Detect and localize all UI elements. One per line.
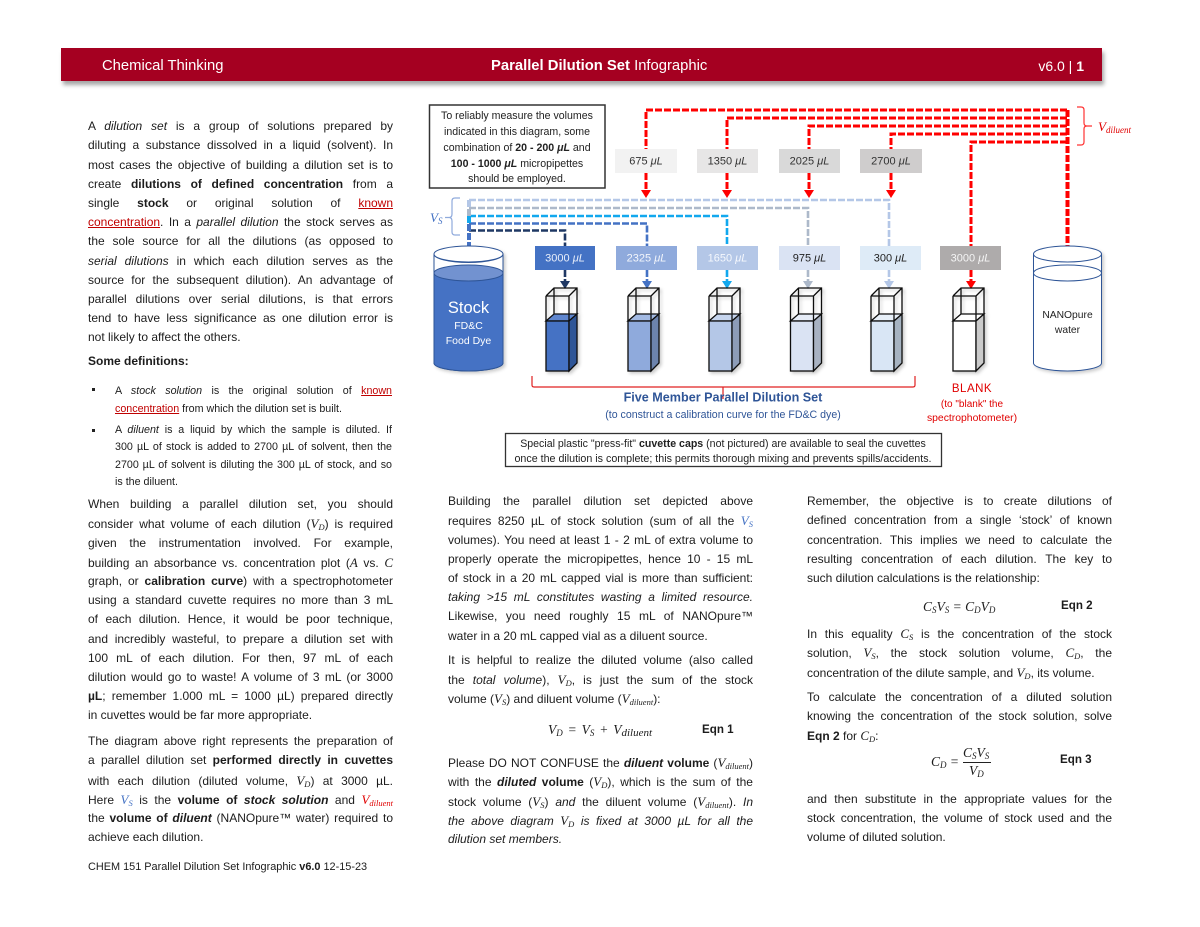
left column: diagram explanation paragraph: The diagram above right represents the preparation of bbox=[88, 734, 393, 748]
stock cylinder: FD&C bbox=[454, 320, 483, 332]
diluent volume labels: 675 μL bbox=[629, 155, 663, 167]
equation 3 fraction: CSVS bbox=[963, 745, 989, 761]
middle column: stock volume paragraph: taking >15 mL constitutes wasting a limited resource. bbox=[448, 590, 753, 604]
heading: blank bbox=[927, 383, 1017, 424]
callout: cuvette caps note: Special plastic "press-fit" cuvette caps (not pictured) are available to seal the cuvettes bbox=[520, 438, 926, 450]
left column: intro paragraph: create dilutions of defined concentration from a bbox=[88, 177, 393, 191]
middle column: stock volume paragraph: properly operate the micropipettes, hence 10 - 15 mL bbox=[448, 552, 753, 566]
equation 3 fraction bbox=[963, 745, 991, 779]
left column: building a parallel dilution set paragraph: of each dilution. Hence, it would be poor technique, bbox=[88, 612, 393, 626]
left column: intro paragraph: single stock or original solution of known bbox=[88, 196, 393, 210]
middle column: do not confuse paragraph: Please DO NOT CONFUSE the diluent volume (Vdiluent) bbox=[448, 755, 753, 771]
header right: version and page: v6.0 | 1 bbox=[1038, 58, 1084, 74]
water cylinder: water bbox=[1054, 325, 1081, 336]
definitions heading: Some definitions: bbox=[88, 354, 189, 368]
left column: building a parallel dilution set paragraph: 100 mL of each dilution. For then, 97 mL of each bbox=[88, 651, 393, 665]
footer note: CHEM 151 Parallel Dilution Set Infographic v6.0 12-15-23 bbox=[88, 861, 367, 873]
bracket: five member dilution set bbox=[532, 376, 915, 399]
left column: building a parallel dilution set paragraph: When building a parallel dilution set, you should bbox=[88, 497, 393, 511]
left column: intro paragraph: A dilution set is a group of solutions prepared by bbox=[88, 119, 393, 133]
definition: diluent: 2700 µL of solvent is diluting the 300 µL of stock, and so bbox=[115, 459, 392, 471]
right column: equality explanation: In this equality CS is the concentration of the stock bbox=[807, 626, 1112, 642]
diluent arrowheads bbox=[641, 190, 976, 289]
middle column: stock volume paragraph: water in a 20 mL capped vial as a diluent source. bbox=[448, 628, 708, 642]
middle column: diluted volume paragraph bbox=[448, 653, 753, 707]
right column: substitute paragraph bbox=[807, 792, 1112, 844]
equation 3 fraction: VD bbox=[969, 763, 984, 779]
diluent volume labels: 2025 μL bbox=[790, 155, 829, 167]
middle column: stock volume paragraph: volumes). You need at least 1 - 2 mL of extra volume to bbox=[448, 533, 753, 547]
left column: building a parallel dilution set paragraph: using a standard cuvette requires no more than 3 mL bbox=[88, 593, 393, 607]
stock arrowheads bbox=[560, 281, 894, 289]
stock volume labels: 3000 μL bbox=[545, 252, 585, 264]
callout: micropipette note: 100 - 1000 μL micropipettes bbox=[451, 158, 583, 170]
equation 3 bbox=[931, 745, 1092, 779]
left column: intro paragraph: the sole source for all the dilutions (as opposed to bbox=[88, 234, 393, 248]
left column: intro paragraph bbox=[88, 119, 394, 344]
right column: objective paragraph bbox=[807, 494, 1112, 585]
left column: diagram explanation paragraph: Here VS is the volume of stock solution and Vdiluent bbox=[88, 792, 393, 808]
diluent volume labels bbox=[615, 149, 922, 173]
left column: building a parallel dilution set paragraph: dilution would go to waste! A volume of 3 mL (or 3000 bbox=[88, 670, 393, 684]
middle column: stock volume paragraph: requires 8250 µL of stock solution (sum of all the VS bbox=[448, 513, 753, 529]
stock volume labels: 300 μL bbox=[874, 252, 907, 264]
stock cylinder bbox=[434, 246, 503, 371]
bracket and label: V stock: S bbox=[438, 216, 443, 226]
middle column: do not confuse paragraph: the above diagram VD is fixed at 3000 µL for all the bbox=[448, 813, 753, 829]
middle column: stock volume paragraph: Likewise, you need roughly 15 mL of NANOpure™ bbox=[448, 609, 753, 623]
left column: intro paragraph: concentration. In a parallel dilution the stock serves as bbox=[88, 215, 393, 229]
stock cylinder: Stock bbox=[448, 299, 490, 317]
cuvette 3 bbox=[709, 288, 740, 371]
water cylinder bbox=[1034, 246, 1102, 371]
equation 2 formula: CSVS = CDVD bbox=[923, 599, 995, 615]
right column: objective paragraph: such dilution calculations is the relationship: bbox=[807, 571, 1040, 585]
callout: micropipette note: To reliably measure the volumes bbox=[441, 110, 593, 122]
right column: objective paragraph: defined concentration from a single ‘stock’ of known bbox=[807, 513, 1112, 527]
middle column: do not confuse paragraph bbox=[448, 755, 753, 846]
stock dashed lines (blue) bbox=[469, 200, 889, 283]
header left: Chemical Thinking: Chemical Thinking bbox=[102, 58, 223, 74]
diluent volume labels: 1350 μL bbox=[708, 155, 747, 167]
stock volume labels: 3000 μL bbox=[951, 252, 990, 264]
right column: objective paragraph: concentration. This implies we need to calculate the bbox=[807, 533, 1112, 547]
left column: diagram explanation paragraph: the volume of diluent (NANOpure™ water) required to bbox=[88, 811, 393, 825]
left column: intro paragraph: serial dilutions in which each dilution serves as the bbox=[88, 254, 393, 268]
left column: diagram explanation paragraph: achieve each dilution. bbox=[88, 830, 203, 844]
cuvette 4 bbox=[790, 288, 822, 371]
equation 1 tag: Eqn 1 bbox=[702, 723, 734, 736]
heading: blank: BLANK bbox=[952, 383, 992, 395]
definition: stock solution: concentration from which the dilution set is built. bbox=[115, 403, 342, 415]
header centre title: Parallel Dilution Set Infographic bbox=[491, 58, 707, 74]
left column: building a parallel dilution set paragraph: consider what volume of each dilution (VD) is required bbox=[88, 516, 393, 532]
right column: substitute paragraph: stock concentration, the volume of stock used and the bbox=[807, 811, 1112, 825]
left column: intro paragraph: tend to have less significance as one dilution error is bbox=[88, 311, 393, 325]
heading: five member parallel dilution set: Five Member Parallel Dilution Set bbox=[624, 390, 823, 404]
bracket and label: V diluent bbox=[1077, 107, 1131, 145]
right column: substitute paragraph: and then substitute in the appropriate values for the bbox=[807, 792, 1112, 806]
bracket and label: V diluent: diluent bbox=[1106, 125, 1131, 135]
callout: micropipette note bbox=[430, 105, 605, 188]
left column: diagram explanation paragraph: a parallel dilution set performed directly in cuvettes bbox=[88, 753, 393, 767]
callout: cuvette caps note bbox=[506, 434, 942, 466]
bullet marker: stock solution bbox=[92, 388, 95, 391]
left column: building a parallel dilution set paragraph: and incredibly wasteful, to prepare a dilution set with bbox=[88, 632, 393, 646]
left column: building a parallel dilution set paragraph: given the instrumentation involved. For example, bbox=[88, 536, 393, 550]
equation 3 tag: Eqn 3 bbox=[1060, 753, 1092, 766]
left column: diagram explanation paragraph: with each dilution (diluted volume, VD) at 3000 µL. bbox=[88, 773, 393, 789]
stock volume labels: 1650 μL bbox=[708, 252, 747, 264]
left column: building a parallel dilution set paragraph: µL; remember 1.000 mL = 1000 µL) prepared directly bbox=[88, 689, 393, 703]
middle column: diluted volume paragraph: It is helpful to realize the diluted volume (also called bbox=[448, 653, 753, 667]
right column: equality explanation: concentration of the dilute sample, and VD, its volume. bbox=[807, 665, 1095, 681]
definition: stock solution: A stock solution is the original solution of known bbox=[115, 385, 392, 397]
left column: intro paragraph: diluting a substance dissolved in a liquid (solvent). In bbox=[88, 138, 393, 152]
stock cylinder: Food Dye bbox=[446, 335, 491, 347]
left column: building a parallel dilution set paragraph: building an absorbance vs. concentration plot (A vs. C bbox=[88, 555, 393, 570]
callout: cuvette caps note: once the dilution is complete; this permits thorough mixing and prevents spills/accidents. bbox=[514, 453, 932, 465]
definition: diluent: 300 µL of stock is added to 2700 µL of solvent, then the bbox=[115, 441, 392, 453]
bullet marker: diluent bbox=[92, 429, 95, 432]
middle column: stock volume paragraph: Building the parallel dilution set depicted above bbox=[448, 494, 753, 508]
left column: building a parallel dilution set paragraph bbox=[88, 497, 394, 722]
left column: intro paragraph: not likely to affect the others. bbox=[88, 330, 241, 344]
definition: stock solution bbox=[115, 385, 392, 415]
diluent volume labels: 2700 μL bbox=[871, 155, 911, 167]
callout: micropipette note: indicated in this diagram, some bbox=[444, 126, 590, 138]
right column: objective paragraph: Remember, the objective is to create dilutions of bbox=[807, 494, 1112, 508]
heading: blank: (to "blank" the bbox=[941, 399, 1004, 410]
cuvette 2 bbox=[628, 288, 659, 371]
middle column: stock volume paragraph bbox=[448, 494, 753, 642]
right column: solving paragraph: knowing the concentration of the stock solution, solve bbox=[807, 709, 1112, 723]
equation 2 bbox=[923, 599, 1093, 615]
definition: diluent: A diluent is a liquid by which the sample is diluted. If bbox=[115, 424, 392, 436]
stock volume labels: 2325 μL bbox=[627, 252, 666, 264]
stock volume labels: 975 μL bbox=[793, 252, 826, 264]
definition: diluent: is the diluent. bbox=[115, 476, 178, 488]
right column: solving paragraph bbox=[807, 690, 1112, 744]
callout: micropipette note: should be employed. bbox=[468, 173, 566, 185]
left column: intro paragraph: most cases the objective of building a dilution set is to bbox=[88, 158, 393, 172]
middle column: do not confuse paragraph: dilution set members. bbox=[448, 832, 562, 846]
heading: blank: spectrophotometer) bbox=[927, 413, 1017, 424]
right column: solving paragraph: Eqn 2 for CD: bbox=[807, 728, 878, 744]
left column: building a parallel dilution set paragraph: graph, or calibration curve) with a spectrophotometer bbox=[88, 574, 393, 588]
middle column: stock volume paragraph: of stock in a 20 mL capped vial is more than sufficient: bbox=[448, 571, 753, 585]
left column: building a parallel dilution set paragraph: in cuvettes would be far more appropriate. bbox=[88, 708, 312, 722]
right column: objective paragraph: resulting concentration of each dilution. The key to bbox=[807, 552, 1112, 566]
cuvette: blank bbox=[953, 288, 984, 371]
right column: equality explanation: solution, VS, the stock solution volume, CD, the bbox=[807, 645, 1112, 661]
cuvette 1 bbox=[546, 288, 577, 371]
diluent dashed lines (red) bbox=[646, 110, 1068, 283]
bracket and label: V stock bbox=[430, 198, 460, 235]
equation 1 formula: VD = VS + Vdiluent bbox=[548, 722, 652, 739]
middle column: do not confuse paragraph: stock volume (VS) and the diluent volume (Vdiluent). In bbox=[448, 794, 753, 810]
right column: substitute paragraph: volume of diluted solution. bbox=[807, 830, 946, 844]
cuvette 5 bbox=[871, 288, 902, 371]
left column: diagram explanation paragraph bbox=[88, 734, 394, 844]
middle column: diluted volume paragraph: the total volume), VD, is just the sum of the stock bbox=[448, 672, 753, 688]
right column: equality explanation bbox=[807, 626, 1112, 681]
bracket and label: V diluent: V bbox=[1098, 119, 1106, 134]
left column: intro paragraph: parallel dilutions over serial dilutions, is that errors bbox=[88, 292, 393, 306]
water cylinder: NANOpure bbox=[1042, 310, 1093, 321]
heading: five member parallel dilution set bbox=[605, 390, 841, 421]
definition: diluent bbox=[115, 424, 392, 488]
callout: micropipette note: combination of 20 - 200 μL and bbox=[443, 142, 591, 154]
right column: solving paragraph: To calculate the concentration of a diluted solution bbox=[807, 690, 1112, 704]
equation 2 tag: Eqn 2 bbox=[1061, 599, 1093, 612]
header banner bbox=[61, 48, 1102, 81]
stock volume labels bbox=[535, 246, 1001, 270]
heading: five member parallel dilution set: (to construct a calibration curve for the FD&C dye) bbox=[605, 409, 841, 421]
bracket and label: V stock: V bbox=[430, 210, 438, 225]
middle column: do not confuse paragraph: with the diluted volume (VD), which is the sum of the bbox=[448, 774, 753, 790]
left column: intro paragraph: source for the subsequent dilution). An advantage of bbox=[88, 273, 393, 287]
equation 1 bbox=[548, 722, 734, 739]
equation 3 left side: CD = bbox=[931, 754, 959, 770]
middle column: diluted volume paragraph: volume (VS) and diluent volume (Vdiluent): bbox=[448, 691, 661, 707]
dilution set diagram bbox=[428, 104, 1132, 468]
